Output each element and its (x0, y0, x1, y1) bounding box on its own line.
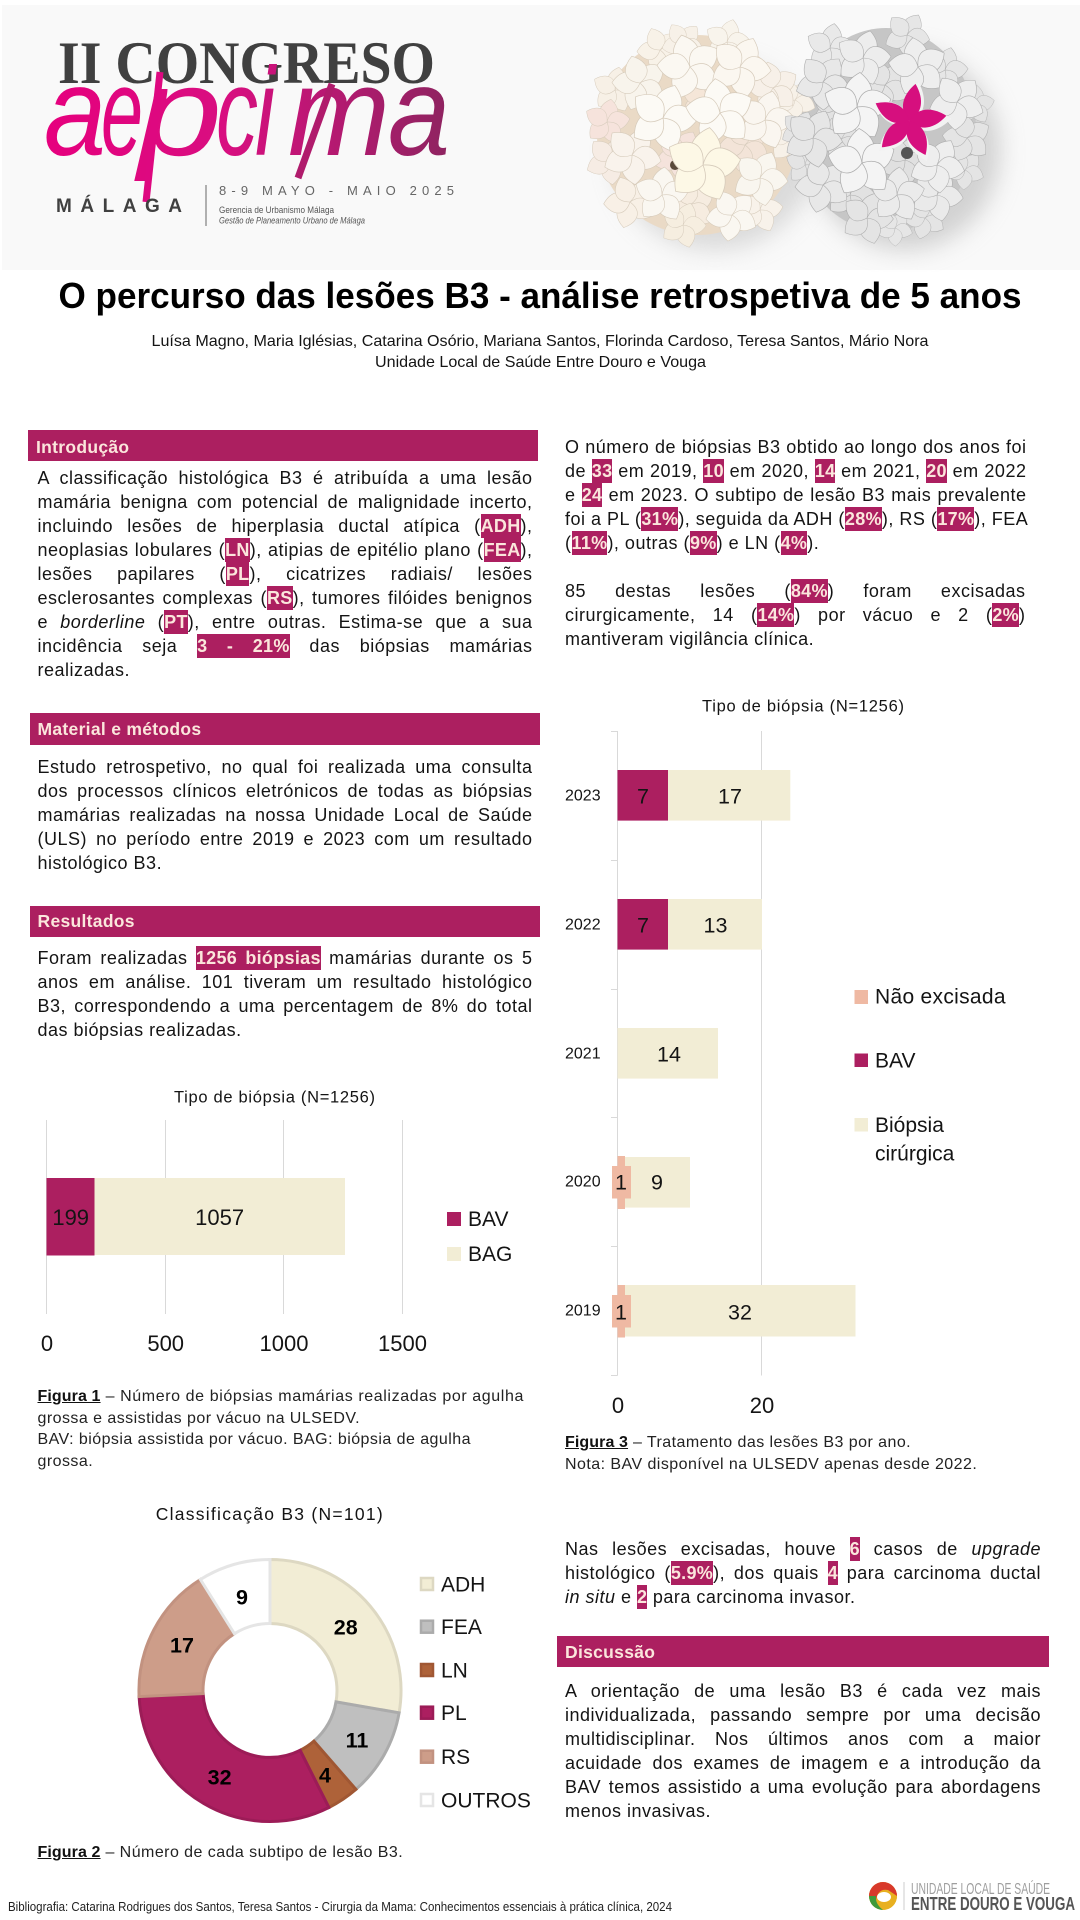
donut values (170, 1586, 368, 1790)
text: upgrade histológico: in situ e 2 para carcinoma invasor. (565, 1586, 855, 1606)
bars 2019: 32 (728, 1300, 752, 1324)
text: introdução: realizadas. (38, 660, 130, 680)
text: introdução: lesões papilares (PL), cicatrizes radiais/ lesões (38, 564, 532, 584)
legend: OUTROS (441, 1790, 531, 1812)
header banner (44, 14, 1018, 268)
heading: Introdução (28, 430, 538, 460)
axis labels: 0 (41, 1331, 53, 1356)
bars 2022: 7 (637, 914, 649, 938)
text: material e métodos: dos processos clínicos eletrónicos de todas as biópsias (38, 780, 532, 800)
axis labels (612, 1393, 774, 1418)
logo: II Congreso: MÁLAGA (56, 195, 182, 217)
authors and affiliation (152, 333, 929, 371)
legend: RS (441, 1746, 470, 1769)
bars 2023: 17 (718, 784, 742, 808)
text: upgrade histológico (565, 1537, 1041, 1609)
title: O percurso das lesões B3 - análise retrospetiva de 5 anos (58, 275, 1022, 316)
text: tratamento das lesões (565, 579, 1026, 649)
axis labels: 0 (612, 1393, 624, 1418)
text: discussão (565, 1680, 1041, 1820)
logo: II Congreso: m (288, 43, 390, 182)
year labels (565, 788, 601, 1320)
legend (854, 986, 1006, 1166)
legend (421, 1574, 531, 1812)
legend: Biópsia (875, 1114, 944, 1137)
legend: Não excisada (875, 986, 1006, 1008)
authors and affiliation: Luísa Magno, Maria Iglésias, Catarina Osório, Mariana Santos, Florinda Cardoso, Teresa Santos, Mário Nora (152, 333, 929, 350)
text: discussão: multidisciplinar. Nos últimos anos com a maior (565, 1728, 1041, 1748)
bars 2020: 1 (615, 1170, 627, 1194)
bars 2021: 14 (657, 1042, 681, 1066)
donut values: 28 (334, 1616, 358, 1640)
donut segments (139, 1560, 401, 1822)
heading: Material e métodos (30, 713, 540, 745)
axis labels: 500 (147, 1331, 184, 1356)
text: material e métodos: mamárias realizadas na nossa Unidade Local de Saúde (38, 804, 532, 824)
text: discussão: individualizada, passando sempre por uma decisão (565, 1704, 1041, 1724)
legend: BAV (468, 1208, 508, 1231)
bars 2021 (618, 1028, 718, 1079)
text: resultados: Foram realizadas 1256 biópsias mamárias durante os 5 (38, 948, 532, 968)
legend: PL (441, 1702, 467, 1725)
logo: II Congreso: II CONGRESO (58, 30, 435, 96)
caption: figura 1: grossa e assistidas por vácuo na ULSEDV. (38, 1410, 360, 1426)
donut values: 32 (208, 1766, 232, 1790)
axis labels: 1000 (260, 1331, 308, 1356)
logo: II Congreso: c (216, 43, 258, 182)
chart title: Tipo de biópsia (N=1256) (174, 1088, 375, 1106)
logo: II Congreso: a (44, 43, 106, 182)
logo: II Congreso: i (255, 43, 277, 182)
chart title: Tipo de biópsia (N=1256) (702, 698, 904, 716)
donut values: 4 (319, 1764, 331, 1788)
legend: cirúrgica (875, 1142, 955, 1166)
bar segments (46, 1178, 345, 1256)
year labels: 2023 (565, 788, 601, 804)
logo: II Congreso: a (388, 43, 450, 182)
bar segments: 199 (52, 1205, 89, 1230)
heading: Discussão (557, 1636, 1048, 1667)
text: resultados continuação: O número de biópsias B3 obtido ao longo dos anos foi (565, 437, 1026, 457)
chart: classificação B3 donut (137, 1504, 531, 1823)
caption: figura 3 (565, 1434, 977, 1472)
bar segments: 1057 (195, 1205, 244, 1230)
text: upgrade histológico: Nas lesões excisadas, houve 6 casos de upgrade (565, 1538, 1041, 1558)
text: introdução: incluindo lesões de hiperplasia ductal atípica (ADH), (38, 516, 532, 536)
text: tratamento das lesões: 85 destas lesões (84%) foram excisadas (565, 581, 1025, 601)
text: discussão: A orientação de uma lesão B3 é cada vez mais (565, 1680, 1041, 1700)
axes and ticks (611, 731, 762, 1376)
logo: II Congreso: e (101, 43, 143, 182)
legend: LN (441, 1660, 468, 1682)
heading: Material e métodos: Material e métodos (38, 719, 201, 739)
bars 2020: 9 (651, 1170, 663, 1194)
logo: II Congreso: 8-9 MAYO - MAIO 2025 (219, 183, 454, 198)
chart: tipo de biópsia bar (41, 1088, 512, 1356)
text: introdução: A classificação histológica B3 é atribuída a uma lesão (38, 468, 532, 488)
bars 2019: 1 (615, 1300, 627, 1324)
text: discussão: menos invasivas. (565, 1800, 711, 1820)
text: introdução: e borderline (PT), entre outras. Estima-se que a sua (38, 612, 533, 632)
text: introdução: neoplasias lobulares (LN), atipias de epitélio plano (FEA), (38, 540, 532, 560)
authors and affiliation: Unidade Local de Saúde Entre Douro e Vouga (375, 354, 706, 371)
legend: BAV (875, 1050, 915, 1072)
text: tratamento das lesões: mantiveram vigilância clínica. (565, 629, 814, 649)
text: discussão: acuidade dos exames de imagem e a introdução da (565, 1752, 1041, 1772)
year labels: 2021 (565, 1046, 601, 1062)
heading: Resultados: Resultados (38, 911, 135, 931)
caption: figura 1: Figura 1 – Número de biópsias mamárias realizadas por agulha (38, 1388, 524, 1405)
text: resultados continuação: foi a PL (31%), seguida da ADH (28%), RS (17%), FEA (565, 509, 1028, 529)
caption: figura 3: Nota: BAV disponível na ULSEDV apenas desde 2022. (565, 1456, 977, 1472)
year labels: 2019 (565, 1302, 601, 1320)
caption: figura 1: BAV: biópsia assistida por vácuo. BAG: biópsia de agulha (38, 1431, 471, 1448)
illustration: flower spheres (574, 3, 1002, 256)
legend: FEA (441, 1616, 482, 1639)
chart title: Classificação B3 (N=101) (156, 1504, 383, 1524)
chart: tratamento por ano (565, 698, 1006, 1418)
text: material e métodos: histológico B3. (38, 852, 162, 872)
logo: II Congreso: Gestão de Planeamento Urbano de Málaga (219, 216, 365, 226)
year labels: 2022 (565, 916, 601, 934)
text: material e métodos: Estudo retrospetivo, no qual foi realizada uma consulta (38, 756, 532, 776)
axis labels: 20 (750, 1393, 774, 1418)
text: introdução: esclerosantes complexas (RS), tumores filóides benignos (38, 588, 532, 608)
icon: logo mark (869, 1882, 897, 1910)
logo: II Congreso: Gerencia de Urbanismo Málaga (219, 205, 335, 216)
text: resultados: B3, correspondendo a uma percentagem de 8% do total (38, 996, 532, 1016)
text: resultados (38, 946, 532, 1040)
legend: ADH (441, 1574, 485, 1596)
donut values: 17 (170, 1634, 194, 1658)
text: resultados continuação: (11%), outras (9%) e LN (4%). (565, 533, 819, 553)
heading: Introdução: Introdução (36, 437, 129, 457)
text: resultados continuação: e 24 em 2023. O subtipo de lesão B3 mais prevalente (565, 485, 1027, 505)
caption: figura 2: Figura 2 – Número de cada subtipo de lesão B3. (38, 1844, 403, 1861)
caption: figura 3: Figura 3 – Tratamento das lesões B3 por ano. (565, 1434, 911, 1451)
axis labels: 1500 (378, 1331, 427, 1356)
text: introdução: incidência seja 3 - 21% das biópsias mamárias (38, 636, 532, 656)
text: material e métodos (38, 756, 532, 873)
bars 2023: 7 (637, 784, 649, 808)
text: discussão: BAV temos assistido a uma evolução para abordagens (565, 1776, 1041, 1796)
bars 2023 (618, 770, 790, 821)
bars 2020 (612, 1156, 690, 1209)
text: material e métodos: (ULS) no período entre 2019 e 2023 com um resultado (38, 828, 532, 848)
caption: figura 1: grossa. (38, 1452, 93, 1470)
logo: II Congreso (44, 30, 454, 226)
heading: Discussão: Discussão (565, 1642, 655, 1662)
text: introdução (38, 468, 533, 680)
axis labels (41, 1331, 427, 1356)
legend: BAG (468, 1243, 512, 1266)
year labels: 2020 (565, 1174, 601, 1190)
bars 2022 (618, 899, 762, 950)
legend (447, 1208, 512, 1266)
text: introdução: mamária benigna com potencial de malignidade incerto, (38, 492, 532, 512)
text: tratamento das lesões: cirurgicamente, 14 (14%) por vácuo e 2 (2%) (565, 605, 1026, 625)
heading: Resultados (30, 906, 540, 936)
text: resultados: das biópsias realizadas. (38, 1020, 242, 1040)
text: upgrade histológico: histológico (5.9%), dos quais 4 para carcinoma ductal (565, 1562, 1041, 1582)
logo: II Congreso: p (133, 43, 222, 182)
caption: figura 1 (38, 1388, 524, 1470)
donut values: 9 (236, 1586, 248, 1610)
bars 2022: 13 (704, 914, 727, 938)
donut values: 11 (346, 1729, 368, 1753)
logo: Unidade Local de Saúde Entre Douro e Vouga (869, 1880, 1075, 1914)
text: resultados: anos em análise. 101 tiveram um resultado histológico (38, 972, 532, 992)
text: resultados continuação: de 33 em 2019, 10 em 2020, 14 em 2021, 20 em 2022 (565, 461, 1026, 481)
bars 2019 (612, 1285, 856, 1338)
text: resultados continuação (565, 437, 1028, 555)
